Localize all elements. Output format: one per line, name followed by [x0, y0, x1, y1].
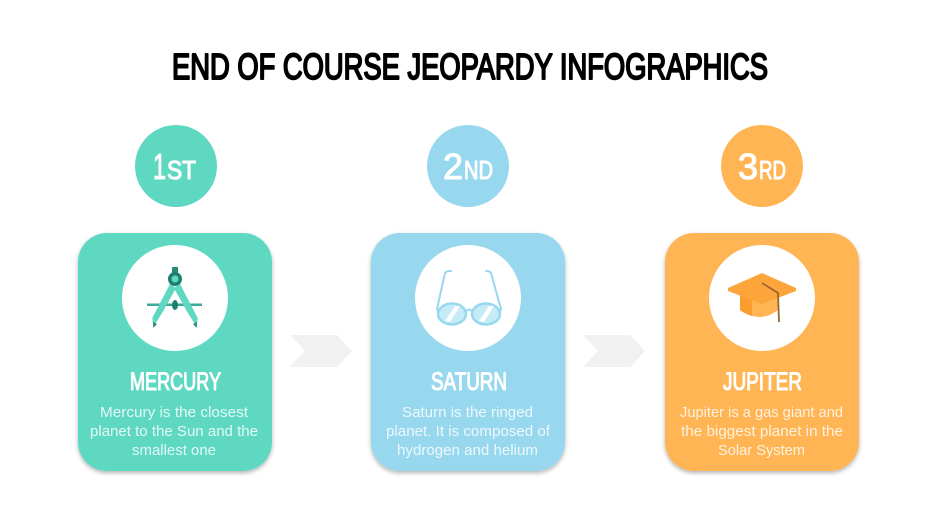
description: Mercury: [90, 405, 258, 459]
icon: graduation cap: [728, 273, 796, 322]
description: Mercury: planet to the Sun and the: [90, 424, 258, 440]
description: Saturn: Saturn is the ringed: [402, 405, 533, 421]
badge: 1st: [135, 125, 217, 207]
badge: 1st: ST: [167, 155, 196, 185]
badge: 2nd: ND: [464, 155, 493, 185]
description: Jupiter: [680, 405, 843, 459]
icon: glasses: [437, 271, 501, 324]
panel: Saturn: [371, 233, 565, 471]
description: Jupiter: the biggest planet in the: [681, 424, 843, 440]
title: END OF COURSE JEOPARDY INFOGRAPHICS: [172, 46, 768, 87]
badge: 3rd: RD: [759, 155, 786, 185]
badge: 3rd: [721, 125, 803, 207]
icon: compass: [147, 267, 202, 328]
panel: Jupiter: [665, 233, 859, 471]
description: Saturn: planet. It is composed of: [386, 424, 551, 440]
panel: Mercury: [78, 233, 272, 471]
badge: 3rd: 3: [738, 146, 758, 187]
description: Jupiter: Solar System: [718, 443, 805, 459]
name: Jupiter: JUPITER: [723, 368, 802, 396]
badge: 2nd: [427, 125, 509, 207]
badge: 2nd: 2: [443, 146, 463, 187]
description: Saturn: [386, 405, 551, 459]
arrow: Mercury to Saturn: [290, 335, 352, 367]
arrow: Saturn to Jupiter: [583, 335, 645, 367]
name: Mercury: MERCURY: [130, 368, 221, 396]
description: Mercury: Mercury is the closest: [100, 405, 248, 421]
badge: 1st: 1: [153, 146, 166, 187]
name: Saturn: SATURN: [431, 368, 507, 396]
description: Mercury: smallest one: [132, 443, 216, 459]
description: Saturn: hydrogen and helium: [397, 443, 538, 459]
description: Jupiter: Jupiter is a gas giant and: [680, 405, 843, 421]
